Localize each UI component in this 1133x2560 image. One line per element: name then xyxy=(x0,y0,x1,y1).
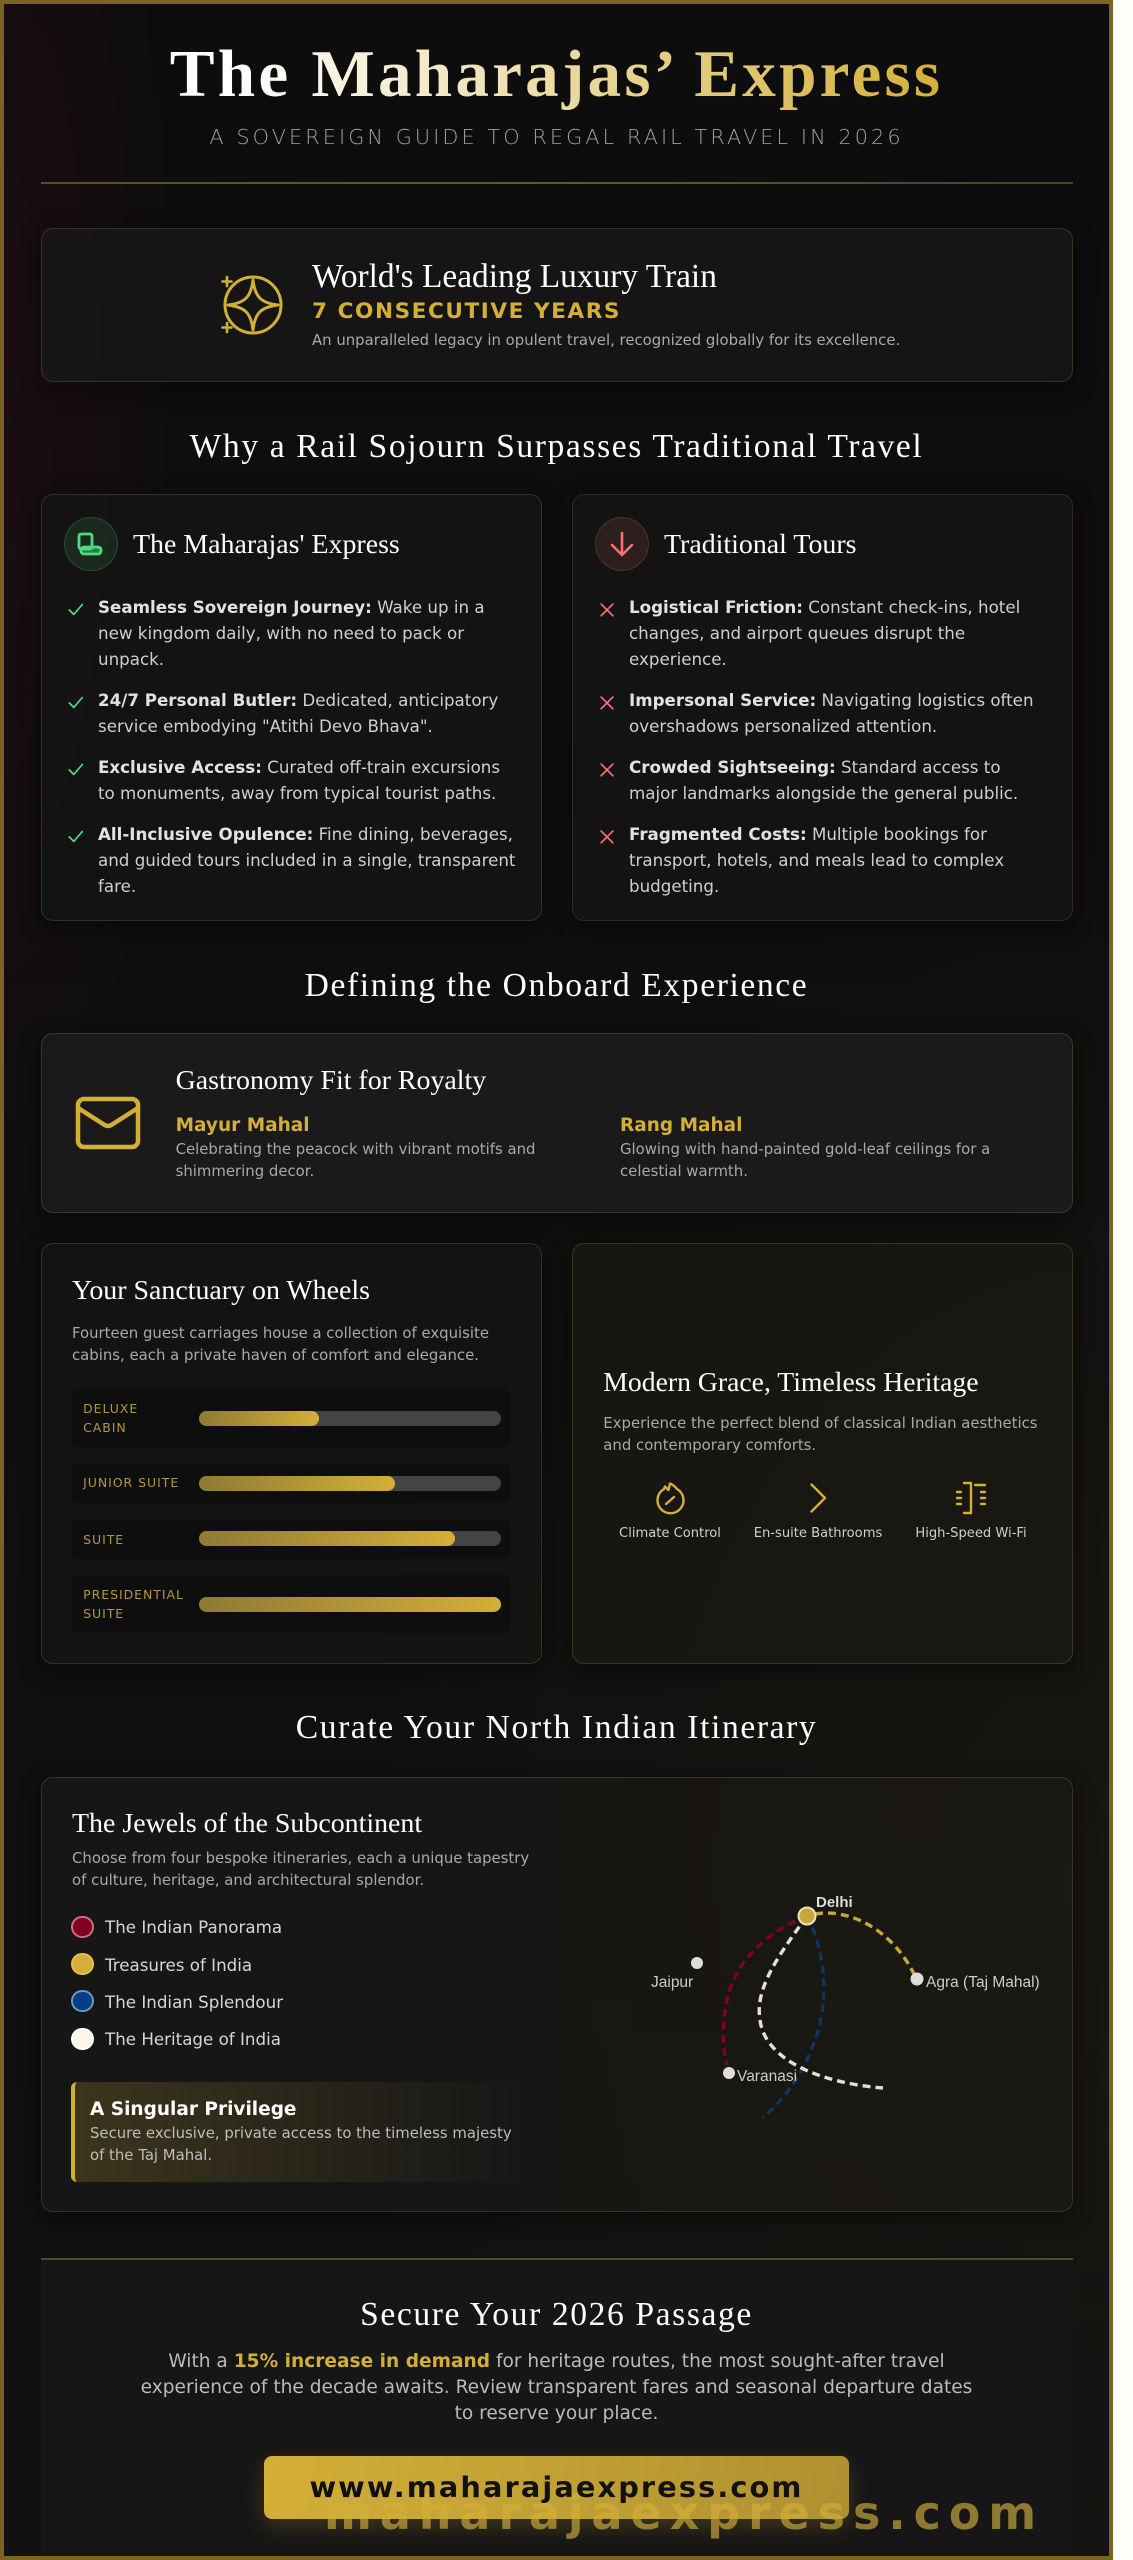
award heading: World's Leading Luxury Train xyxy=(312,258,717,295)
benefit: access xyxy=(68,757,500,803)
legend label: panorama: The Indian Panorama xyxy=(105,1917,282,1937)
modern grace description xyxy=(603,1414,1038,1454)
itinerary intro heading: The Jewels of the Subcontinent xyxy=(72,1808,422,1839)
drawback: crowds: major landmarks alongside the general public. xyxy=(629,783,1018,803)
route: Indian Panorama xyxy=(723,1916,807,2065)
sanctuary description xyxy=(72,1324,489,1364)
drawback: friction: experience. xyxy=(629,649,727,669)
drawback: crowds: Crowded Sightseeing: Standard access to xyxy=(629,757,1001,777)
label: DELUXE xyxy=(83,1401,138,1416)
row: deluxe cabin xyxy=(72,1389,511,1447)
drawback: impersonal: Impersonal Service: Navigating logistics often xyxy=(629,690,1034,710)
row: junior suite xyxy=(72,1463,511,1503)
bar xyxy=(199,1476,501,1490)
panel: sanctuary cabins xyxy=(41,1243,542,1664)
benefit: all-inclusive: All-Inclusive Opulence: Fine dining, beverages, xyxy=(98,824,513,844)
button: website xyxy=(264,2456,849,2519)
drawback: crowds xyxy=(600,757,1018,803)
benefit: all-inclusive: and guided tours included in a single, transparent xyxy=(98,850,515,870)
callout text: Secure exclusive, private access to the timeless majesty xyxy=(90,2124,512,2142)
label: bathrooms: En-suite Bathrooms xyxy=(754,1526,882,1541)
legend dot: splendour xyxy=(71,1990,94,2012)
route: Treasures of India xyxy=(815,1913,914,1974)
icon: climate control xyxy=(656,1482,685,1514)
callout text xyxy=(90,2124,512,2164)
sanctuary description: Fourteen guest carriages house a collection of exquisite xyxy=(72,1324,489,1342)
footer heading: Secure Your 2026 Passage xyxy=(360,2296,753,2332)
heading: onboard section: Defining the Onboard Experience xyxy=(305,966,808,1004)
restaurant name: Rang Mahal xyxy=(620,1115,742,1136)
legend label: treasures: Treasures of India xyxy=(105,1955,252,1975)
panel: footer call to action xyxy=(41,2258,1073,2556)
panel: award banner xyxy=(41,228,1073,382)
bar xyxy=(199,1410,501,1426)
benefit: access: Exclusive Access: Curated off-train excursions xyxy=(98,757,500,777)
icon: train badge xyxy=(64,517,118,571)
icon: envelope xyxy=(76,1096,140,1150)
subtitle: A SOVEREIGN GUIDE TO REGAL RAIL TRAVEL IN 2026 xyxy=(209,125,904,149)
modern grace heading: Modern Grace, Timeless Heritage xyxy=(603,1366,979,1397)
drawback: costs: budgeting. xyxy=(629,876,719,896)
legend dot: heritage xyxy=(71,2028,94,2050)
benefit: all-inclusive xyxy=(68,824,516,896)
drawback: costs: Fragmented Costs: Multiple bookings for xyxy=(629,824,987,844)
city: Delhi xyxy=(798,1894,853,1924)
map: rail routes xyxy=(651,1894,1040,2120)
restaurant: Rang Mahal xyxy=(620,1115,990,1180)
panel: gastronomy xyxy=(41,1033,1073,1213)
label xyxy=(83,1401,138,1435)
benefit: seamless journey xyxy=(68,597,485,669)
drawback: friction: Logistical Friction: Constant check-ins, hotel xyxy=(629,597,1020,617)
sanctuary description: cabins, each a private haven of comfort and elegance. xyxy=(72,1346,479,1364)
drawback: impersonal: overshadows personalized attention. xyxy=(629,716,937,736)
benefit: butler: service embodying "Atithi Devo Bhava". xyxy=(98,716,433,736)
restaurant description: Glowing with hand-painted gold-leaf ceilings for a xyxy=(620,1140,990,1158)
panel: itineraries xyxy=(41,1777,1073,2212)
restaurant: Mayur Mahal xyxy=(176,1115,535,1180)
legend dot: panorama xyxy=(71,1916,94,1938)
benefits list xyxy=(68,597,516,896)
panel: Traditional Tours xyxy=(572,494,1073,921)
benefit: seamless journey: unpack. xyxy=(98,649,164,669)
label xyxy=(83,1587,184,1621)
bar chart: cabin sizes xyxy=(82,1401,501,1621)
icon: bathrooms xyxy=(810,1483,826,1513)
award description: An unparalleled legacy in opulent travel, recognized globally for its excellence. xyxy=(312,331,900,349)
restaurant description xyxy=(620,1140,990,1180)
drawback: friction xyxy=(600,597,1020,669)
restaurant description: Celebrating the peacock with vibrant motifs and xyxy=(176,1140,535,1158)
footer paragraph xyxy=(141,2351,972,2424)
row: suite xyxy=(72,1518,511,1558)
footer paragraph: With a 15% increase in demand for heritage routes, the most sought-after travel xyxy=(168,2351,945,2372)
callout text: of the Taj Mahal. xyxy=(90,2146,212,2164)
drawback: friction: changes, and airport queues disrupt the xyxy=(629,623,965,643)
city: Jaipur: Jaipur xyxy=(651,1974,693,1991)
title: The Maharajas’ Express xyxy=(170,36,943,111)
label: PRESIDENTIAL xyxy=(83,1587,184,1602)
icon: down arrow badge xyxy=(595,517,649,571)
label: SUITE xyxy=(83,1532,124,1546)
benefit: access: to monuments, away from typical tourist paths. xyxy=(98,783,496,803)
icon: wi-fi xyxy=(956,1482,986,1514)
footer paragraph: experience of the decade awaits. Review transparent fares and seasonal departure dates xyxy=(141,2377,972,2398)
drawback: costs xyxy=(600,824,1004,896)
callout: a singular privilege xyxy=(71,2082,526,2182)
route: Heritage of India xyxy=(759,1916,883,2088)
benefit: all-inclusive: fare. xyxy=(98,876,136,896)
city: Agra: Agra (Taj Mahal) xyxy=(926,1974,1040,1991)
callout title: A Singular Privilege xyxy=(90,2098,296,2120)
city: Delhi: Delhi xyxy=(816,1894,853,1911)
drawbacks list xyxy=(600,597,1034,896)
sanctuary heading: Your Sanctuary on Wheels xyxy=(72,1275,370,1306)
column heading: Traditional Tours xyxy=(664,529,857,560)
benefit: butler: 24/7 Personal Butler: Dedicated, anticipatory xyxy=(98,690,498,710)
restaurant description: shimmering decor. xyxy=(176,1162,314,1180)
route: Indian Splendour xyxy=(762,1916,824,2118)
benefit: butler xyxy=(68,690,498,736)
heading: comparison section: Why a Rail Sojourn Surpasses Traditional Travel xyxy=(190,428,923,464)
label: climate control: Climate Control xyxy=(619,1526,721,1541)
panel: The Maharajas' Express xyxy=(41,494,542,921)
footer paragraph: to reserve your place. xyxy=(455,2403,658,2424)
restaurant description: celestial warmth. xyxy=(620,1162,748,1180)
city: Varanasi: Varanasi xyxy=(737,2068,797,2085)
itinerary description: Choose from four bespoke itineraries, each a unique tapestry xyxy=(72,1849,529,1867)
ghost url text: maharajaexpress.com xyxy=(324,2486,1044,2540)
modern grace description: Experience the perfect blend of classical Indian aesthetics xyxy=(603,1414,1038,1432)
benefit: seamless journey: Seamless Sovereign Journey: Wake up in a xyxy=(98,597,485,617)
icon: award star xyxy=(221,276,282,334)
button: website: www.maharajaexpress.com xyxy=(309,2470,804,2504)
legend dot: treasures xyxy=(71,1952,94,1975)
label: wi-fi: High-Speed Wi-Fi xyxy=(915,1526,1027,1541)
gastronomy heading: Gastronomy Fit for Royalty xyxy=(176,1065,486,1096)
itinerary description xyxy=(72,1849,529,1889)
label: CABIN xyxy=(83,1420,127,1435)
restaurant name: Mayur Mahal xyxy=(176,1115,310,1136)
heading: itinerary section: Curate Your North Indian Itinerary xyxy=(296,1708,817,1746)
restaurant description xyxy=(176,1140,535,1180)
label: SUITE xyxy=(83,1606,124,1621)
bar xyxy=(199,1531,501,1546)
bar xyxy=(199,1596,501,1612)
label: JUNIOR SUITE xyxy=(83,1474,179,1490)
drawback: impersonal xyxy=(600,690,1034,736)
city: Jaipur xyxy=(651,1957,703,1991)
column heading: The Maharajas' Express xyxy=(133,529,400,560)
itinerary description: of culture, heritage, and architectural splendor. xyxy=(72,1871,424,1889)
panel: modern grace xyxy=(572,1243,1073,1664)
drawback: costs: transport, hotels, and meals lead to complex xyxy=(629,850,1004,870)
legend label: heritage: The Heritage of India xyxy=(105,2029,281,2049)
legend: itineraries xyxy=(71,1916,284,2050)
row: presidential suite xyxy=(72,1575,511,1633)
benefit: seamless journey: new kingdom daily, with no need to pack or xyxy=(98,623,464,643)
legend label: splendour: The Indian Splendour xyxy=(105,1992,283,2012)
modern grace description: and contemporary comforts. xyxy=(603,1436,816,1454)
award highlight: 7 CONSECUTIVE YEARS xyxy=(312,298,621,324)
